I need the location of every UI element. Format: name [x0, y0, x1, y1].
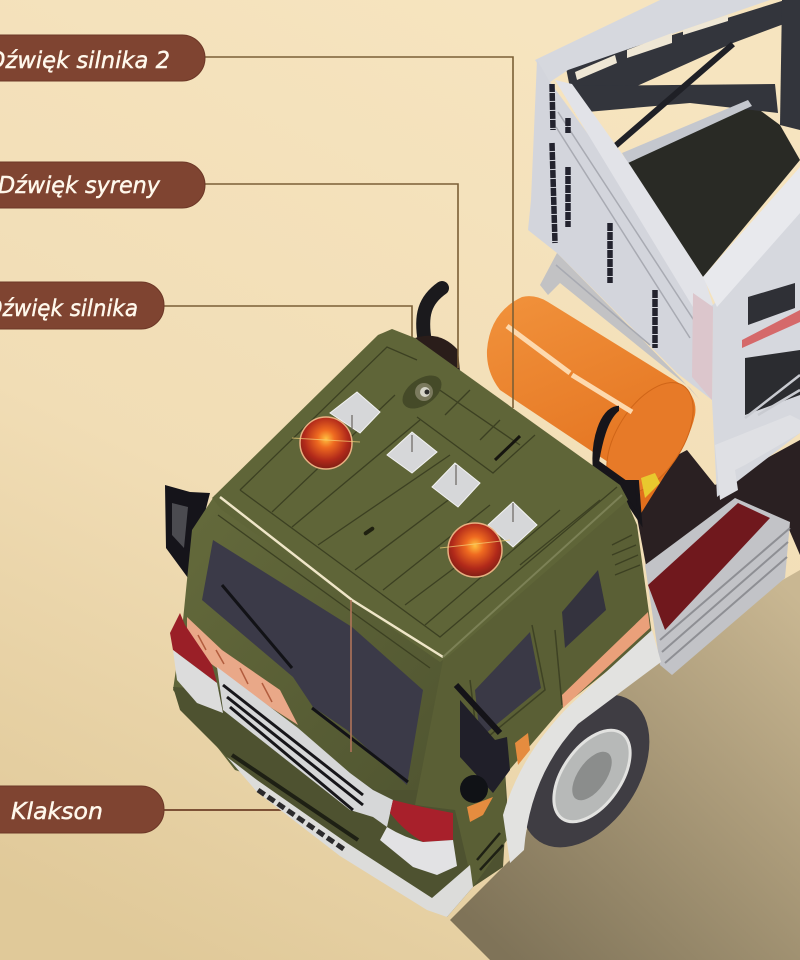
buttons	[330, 392, 537, 547]
rear small window	[562, 570, 606, 648]
side cab body	[415, 497, 652, 887]
fender	[503, 630, 661, 863]
rack lower strip	[540, 253, 700, 400]
amber visor strip	[187, 617, 298, 725]
trailer rack	[528, 0, 800, 500]
rack lower rail	[715, 415, 800, 500]
rack lower window	[745, 350, 800, 415]
bumper plate	[258, 790, 345, 850]
red tray	[645, 498, 790, 675]
vent lines	[612, 535, 640, 575]
label: engine sound	[0, 282, 164, 329]
rack red stripe	[742, 310, 800, 348]
tank warning sticker	[641, 473, 660, 498]
roof panel	[212, 329, 628, 662]
windshield	[202, 540, 423, 785]
roof ribs	[218, 347, 617, 668]
orange side marker	[515, 733, 530, 765]
callout line: engine sound	[164, 306, 412, 338]
rack rim light bar	[622, 100, 752, 163]
rack interior fabric	[627, 103, 800, 277]
lower side slots	[477, 833, 503, 870]
label: horn: Klakson	[11, 799, 103, 825]
door window	[475, 632, 541, 738]
label: siren sound	[0, 162, 205, 208]
round mirror	[460, 775, 488, 803]
grille	[217, 667, 393, 827]
rack cross brace	[613, 44, 733, 148]
exhaust pipe	[415, 288, 460, 372]
door mirror arm	[456, 685, 500, 733]
roof side highlight	[443, 495, 622, 657]
lower body filler	[173, 687, 507, 917]
rack diagonal rim	[555, 80, 713, 312]
roof camera	[397, 369, 447, 415]
callout line: horn	[164, 809, 282, 811]
label: horn	[0, 786, 164, 833]
tank bracket	[594, 408, 640, 520]
right head light	[380, 800, 457, 875]
rack front window	[748, 283, 795, 325]
rack side slots	[552, 84, 655, 348]
callout line: engine sound 2	[205, 57, 513, 408]
horn callout vertical	[350, 600, 352, 752]
windshield wipers	[222, 585, 408, 782]
truck cab	[170, 329, 676, 917]
tank body	[487, 296, 695, 515]
side mirror	[165, 485, 210, 578]
roof slot	[495, 436, 520, 460]
tank highlight	[507, 326, 632, 412]
rack dark frame	[566, 0, 800, 130]
left head light	[170, 613, 223, 713]
lower side marker	[467, 797, 493, 822]
label: siren sound: Dźwięk syreny	[0, 173, 160, 199]
front cab body	[173, 495, 450, 810]
right lamp	[440, 523, 510, 577]
orange tank	[487, 296, 711, 515]
wheel	[494, 671, 676, 871]
bumper white edge	[227, 757, 473, 917]
button tick marks	[352, 415, 513, 522]
door stripe	[562, 612, 650, 708]
roof vent	[363, 526, 375, 536]
rack front panel	[712, 200, 800, 497]
label: engine sound 2	[0, 35, 205, 81]
tank end cap	[589, 368, 711, 508]
door mirror	[460, 700, 510, 793]
rear dark chassis	[630, 440, 800, 640]
roof front highlight	[220, 497, 443, 657]
bumper slot	[232, 755, 358, 840]
rack top beam slots	[575, 15, 728, 80]
side door seams	[470, 625, 562, 745]
rack top beam	[535, 0, 770, 82]
ground shadow	[450, 570, 800, 960]
left lamp	[292, 417, 360, 469]
callout line: siren	[205, 184, 458, 368]
rack side panel	[528, 60, 713, 400]
